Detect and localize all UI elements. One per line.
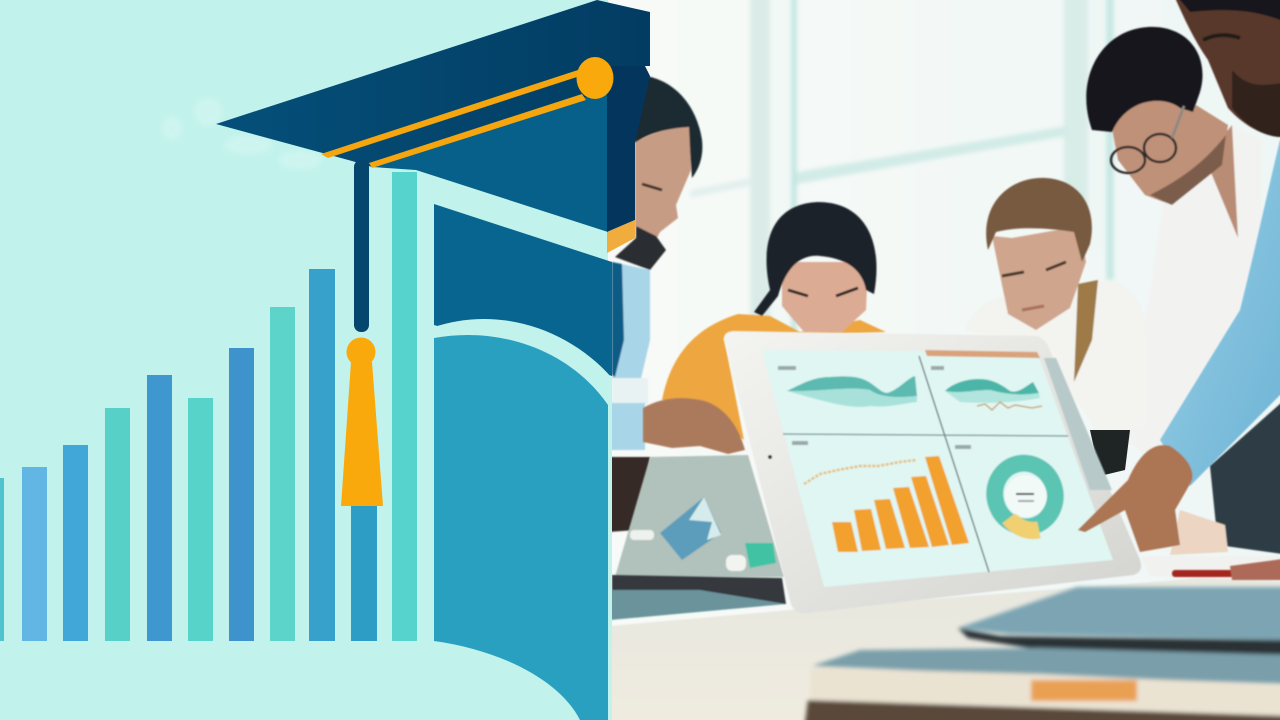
cap button <box>576 57 614 99</box>
office window background <box>600 0 1280 720</box>
notebook cover <box>812 648 1280 684</box>
donut chart lower right <box>955 445 1063 535</box>
camera <box>768 455 772 459</box>
notebook pages <box>810 668 1280 716</box>
cap cords <box>321 57 614 168</box>
graduation cap body <box>372 90 612 720</box>
cap accent <box>607 220 635 253</box>
foreground stack of folders and books <box>804 587 1280 720</box>
person: woman on left behind cap <box>608 75 702 450</box>
panel: illustrated left background <box>0 0 650 720</box>
bar chart <box>0 172 417 641</box>
person: arm in blue shirt with pointing hand <box>1078 140 1280 580</box>
bar chart lower left <box>792 441 969 552</box>
panel: photo of team reviewing dashboard <box>600 0 1280 720</box>
tassel cord <box>354 160 369 332</box>
slate folder <box>958 587 1280 655</box>
tablet showing dashboard <box>724 331 1141 613</box>
graduation cap mortarboard <box>216 0 650 167</box>
background dark trousers <box>1090 430 1130 476</box>
red pen and hand on table <box>1172 558 1280 580</box>
dark forearm under sleeve <box>608 457 650 532</box>
orange label <box>1031 680 1137 701</box>
area chart top left <box>778 366 917 407</box>
hair strip over cap edge <box>607 66 650 232</box>
person: man in blue shirt top right <box>1176 0 1280 137</box>
tassel <box>341 338 383 506</box>
tablet body <box>724 331 1141 613</box>
tablet screen <box>762 350 1113 587</box>
tablet side shading <box>1044 358 1112 490</box>
notebook base <box>804 700 1280 720</box>
person: man with glasses <box>1086 27 1262 470</box>
hand on laptop <box>643 398 745 454</box>
person: woman in orange top <box>662 202 886 440</box>
screen dividers <box>783 356 1068 572</box>
person: short-haired woman <box>966 178 1146 430</box>
area chart top right <box>931 366 1042 410</box>
laptop behind tablet <box>615 455 784 577</box>
soft cloud behind cap <box>162 98 322 169</box>
table surface <box>610 556 1280 720</box>
